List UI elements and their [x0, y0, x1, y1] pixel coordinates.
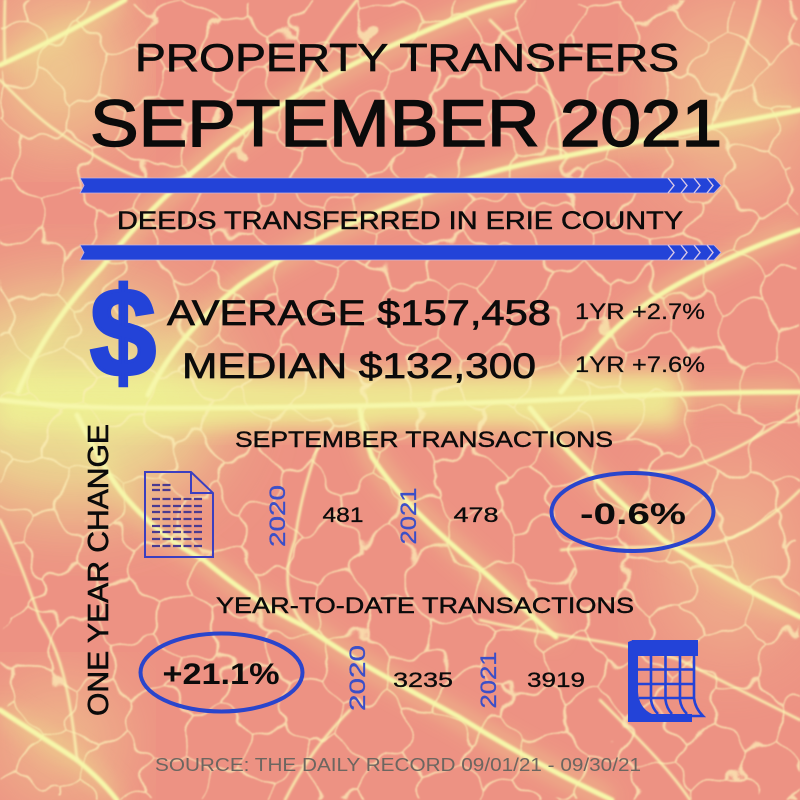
label: 2021: 2021 [396, 487, 421, 545]
subtitle: DEEDS TRANSFERRED IN ERIE COUNTY [117, 207, 683, 235]
value: 3919: 3919 [527, 669, 585, 692]
source line: SOURCE: THE DAILY RECORD 09/01/21 - 09/30/21 [155, 755, 641, 775]
callout: -0.6%: -0.6% [580, 498, 686, 531]
heading: September transactions: SEPTEMBER TRANSACTIONS [235, 427, 613, 452]
label: 2020: 2020 [345, 645, 370, 711]
median one-year change: 1YR +7.6% [575, 352, 705, 377]
arrow bar bottom [80, 245, 721, 260]
label: 2020: 2020 [265, 485, 290, 547]
average one-year change: 1YR +2.7% [575, 299, 705, 324]
title line 2: SEPTEMBER 2021 [90, 86, 722, 160]
icon: calendar [628, 640, 703, 722]
value: 3235: 3235 [393, 669, 453, 692]
value: 478: 478 [454, 504, 498, 527]
vertical label: one year change: ONE YEAR CHANGE [83, 424, 115, 716]
heading: year-to-date transactions: YEAR-TO-DATE TRANSACTIONS [216, 593, 634, 618]
icon: dollar sign: $ [90, 262, 156, 403]
icon: document [145, 472, 213, 557]
label: 2021: 2021 [476, 651, 501, 709]
arrow bar top [80, 178, 721, 193]
value: 481: 481 [322, 504, 364, 527]
average price: AVERAGE $157,458 [167, 294, 551, 333]
title line 1: PROPERTY TRANSFERS [135, 37, 679, 80]
callout: +21.1% [140, 634, 302, 712]
median price: MEDIAN $132,300 [182, 347, 536, 386]
callout: +21.1%: +21.1% [162, 658, 280, 691]
callout: -0.6% [552, 473, 714, 551]
